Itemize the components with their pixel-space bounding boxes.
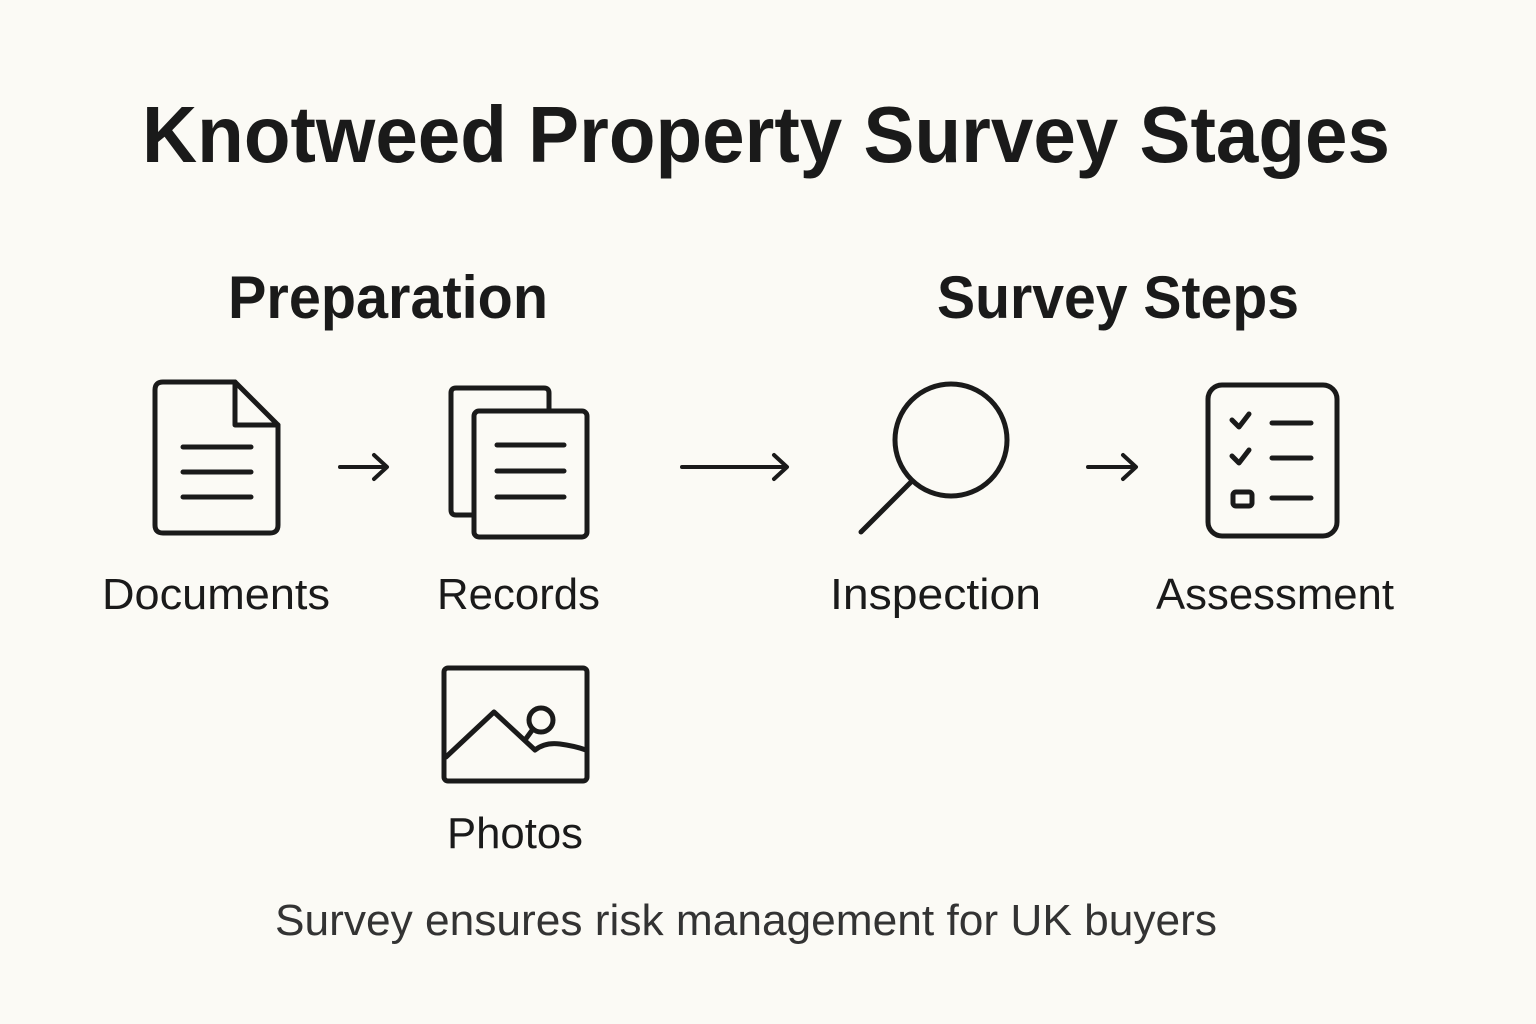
icon: records — [451, 388, 587, 537]
label: Assessment: Assessment — [1156, 570, 1394, 619]
label: Inspection: Inspection — [830, 570, 1041, 619]
icon: magnifier — [861, 384, 1007, 532]
label: Documents: Documents — [102, 570, 330, 619]
icon: photo — [444, 668, 587, 781]
arrow: preparation to survey steps — [682, 455, 787, 479]
label: Records: Records — [437, 570, 600, 619]
footer text: Survey ensures risk management for UK buyers — [275, 896, 1217, 945]
arrow: documents to records — [340, 455, 387, 479]
icon: document — [155, 382, 278, 533]
icon: checklist — [1208, 385, 1337, 536]
title: Knotweed Property Survey Stages — [142, 90, 1390, 179]
heading: Survey Steps: Survey Steps — [937, 264, 1299, 331]
heading: Preparation: Preparation — [228, 264, 548, 331]
arrow: inspection to assessment — [1088, 455, 1136, 479]
label: Photos: Photos — [447, 809, 583, 858]
